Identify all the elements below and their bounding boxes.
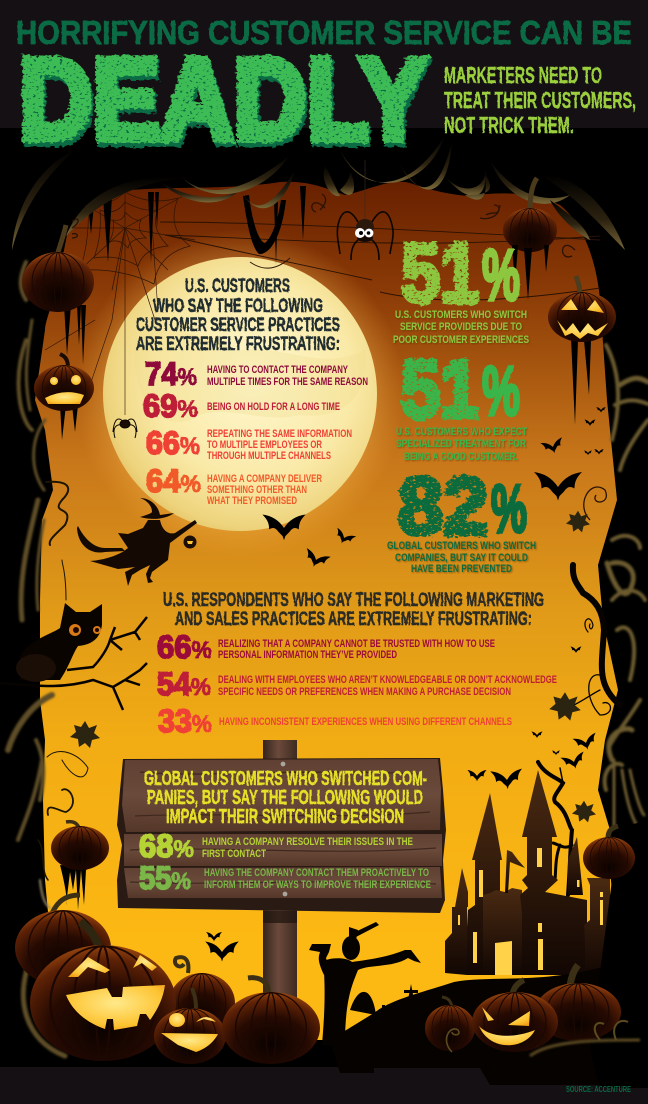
marketing stat: 66%: REALIZING THAT A COMPANY CANNOT BE TRUSTED WITH HOW TO USE xyxy=(218,638,495,650)
right stat: 82% xyxy=(387,461,536,575)
moon panel heading: CUSTOMER SERVICE PRACTICES xyxy=(136,315,340,336)
moon panel heading: ARE EXTREMELY FRUSTRATING: xyxy=(136,334,340,355)
sign stat: 55%: 55% xyxy=(139,860,191,896)
subheading xyxy=(444,62,636,138)
graveyard silhouettes xyxy=(350,984,418,1020)
moon stat: 64%: WHAT THEY PROMISED xyxy=(207,495,297,507)
black vine on right xyxy=(568,565,620,715)
moon stat: 69% xyxy=(143,388,340,424)
footer band xyxy=(0,1067,648,1104)
moon stat: 66%: THROUGH MULTIPLE CHANNELS xyxy=(207,450,331,462)
pumpkin mid back xyxy=(169,957,235,1033)
moon stat: 64%: 64% xyxy=(146,463,201,499)
sign stat: 68% xyxy=(139,828,413,864)
orange sky arena xyxy=(35,182,620,1040)
sign stat: 68%: FIRST CONTACT xyxy=(202,848,266,860)
right stat: 51% expect: SPECIALIZED TREATMENT FOR xyxy=(396,438,526,450)
marketing stat: 66% xyxy=(157,629,495,665)
right stat: 51% expect: U.S. CUSTOMERS WHO EXPECT xyxy=(396,426,527,438)
moon panel heading xyxy=(136,276,340,355)
moon stat: 69%: BEING ON HOLD FOR A LONG TIME xyxy=(207,401,340,413)
pumpkin on left branch xyxy=(51,822,109,910)
sign heading: PANIES, BUT SAY THE FOLLOWING WOULD xyxy=(147,787,423,809)
marketing stat: 66%: PERSONAL INFORMATION THEY’VE PROVIDED xyxy=(218,649,397,661)
sign stat: 68%: HAVING A COMPANY RESOLVE THEIR ISSUES IN THE xyxy=(202,836,413,848)
marketing stat: 54%: 54% xyxy=(157,666,211,702)
moon glow xyxy=(75,229,405,559)
ground hill xyxy=(330,960,648,1085)
right stat: 82%: COMPANIES, BUT SAY IT COULD xyxy=(395,552,528,564)
marketing stat: 54% xyxy=(157,666,557,702)
dead tree by castle xyxy=(538,762,572,895)
right frame vines xyxy=(605,345,648,840)
big jack-o-lantern xyxy=(30,922,176,1061)
sign stat: 68%: 68% xyxy=(139,828,194,864)
moon xyxy=(103,257,377,531)
bats xyxy=(205,407,606,961)
sign heading: GLOBAL CUSTOMERS WHO SWITCHED COM- xyxy=(144,768,427,790)
icon: witch on broom xyxy=(77,498,197,586)
right stat: 51% expect: 51 xyxy=(401,344,479,435)
castle windows xyxy=(458,848,603,975)
pumpkin back left xyxy=(15,895,111,986)
moon stat: 74% xyxy=(145,356,368,392)
cobweb xyxy=(72,190,195,320)
header band xyxy=(0,0,648,128)
hanging threads and wires xyxy=(45,195,600,415)
subheading: NOT TRICK THEM. xyxy=(444,112,574,138)
moon stat: 74%: 74% xyxy=(145,356,197,392)
icon: left jack-o-lantern xyxy=(34,354,94,440)
icon: big spider xyxy=(337,160,393,260)
headline: deadly: DEADLY xyxy=(19,34,427,164)
right stat: 51% expect: % xyxy=(482,352,520,430)
right stat: 51% expect xyxy=(396,344,527,463)
icon: right jack-o-lantern xyxy=(548,276,616,425)
icon: black cat on branch xyxy=(0,603,147,710)
signpost xyxy=(263,740,297,1010)
canopy vines xyxy=(12,135,625,250)
moon stat: 64%: SOMETHING OTHER THAN xyxy=(207,484,307,496)
leaves xyxy=(70,511,596,822)
moon stat: 66%: 66% xyxy=(146,425,200,461)
left frame vines xyxy=(8,262,65,1056)
right stat: 51% expect: BEING A GOOD CUSTOMER. xyxy=(404,451,518,463)
right trunk below vine xyxy=(610,820,648,1000)
right stat: 51% switch: U.S. CUSTOMERS WHO SWITCH xyxy=(395,309,527,321)
right stat: 82%: 82 xyxy=(398,461,488,552)
right stat: 51% switch: 51 xyxy=(401,226,479,320)
right stat: 51% switch: % xyxy=(482,236,520,316)
moon panel heading: U.S. CUSTOMERS xyxy=(185,276,290,297)
icon: zombie with axe xyxy=(309,922,421,1045)
marketing stat: 33%: 33% xyxy=(158,703,212,739)
right stat: 82%: HAVE BEEN PREVENTED xyxy=(411,563,512,575)
right stat: 51% switch: SERVICE PROVIDERS DUE TO xyxy=(400,321,522,333)
right edge dark xyxy=(590,870,648,1088)
marketing stat: 33%: HAVING INCONSISTENT EXPERIENCES WHEN USING DIFFERENT CHANNELS xyxy=(219,716,512,728)
right jack-o-lantern bottom xyxy=(472,980,640,1056)
marketing section heading xyxy=(163,590,544,630)
right stat: 51% switch xyxy=(393,226,529,346)
center pumpkin xyxy=(222,978,320,1064)
curl ornaments xyxy=(72,194,606,520)
moon stat: 64% xyxy=(146,463,322,507)
moon stat: 74%: MULTIPLE TIMES FOR THE SAME REASON xyxy=(207,376,368,388)
sign stat: 55%: INFORM THEM OF WAYS TO IMPROVE THEIR EXPERIENCE xyxy=(204,879,431,891)
sign heading xyxy=(144,768,427,828)
sign stat: 55% xyxy=(139,860,431,896)
back right pumpkin xyxy=(535,965,628,1041)
sign heading: IMPACT THEIR SWITCHING DECISION xyxy=(166,806,404,828)
sign board xyxy=(117,758,446,913)
marketing stat: 54%: SPECIFIC NEEDS OR PREFERENCES WHEN MAKING A PURCHASE DECISION xyxy=(218,686,511,698)
small jack-o-lantern xyxy=(154,988,226,1064)
castle xyxy=(445,770,610,975)
pumpkin on right vine xyxy=(583,826,635,879)
marketing stat: 33% xyxy=(158,703,512,739)
icon: small spider xyxy=(113,419,137,438)
moon stat: 69%: 69% xyxy=(143,388,198,424)
moon stat: 66% xyxy=(146,425,352,462)
headline: deadly: DEADLY xyxy=(21,38,429,168)
moon panel heading: WHO SAY THE FOLLOWING xyxy=(153,296,323,317)
moon stat: 64%: HAVING A COMPANY DELIVER xyxy=(207,473,322,485)
icon: top right pumpkin xyxy=(503,178,557,300)
marketing stat: 66%: 66% xyxy=(157,629,212,665)
curly vines on left xyxy=(38,482,88,880)
moon stat: 66%: REPEATING THE SAME INFORMATION xyxy=(207,428,352,440)
icon: top left pumpkin xyxy=(22,225,94,365)
moon stat: 66%: TO MULTIPLE EMPLOYEES OR xyxy=(207,439,322,451)
sign stat: 55%: HAVING THE COMPANY CONTACT THEM PROACTIVELY TO xyxy=(204,867,429,879)
right small pumpkin xyxy=(425,997,475,1052)
right stat: 82%: GLOBAL CUSTOMERS WHO SWITCH xyxy=(387,540,536,552)
right stat: 51% switch: POOR CUSTOMER EXPERIENCES xyxy=(393,334,529,346)
moon stat: 74%: HAVING TO CONTACT THE COMPANY xyxy=(207,364,348,376)
right stat: 82%: % xyxy=(491,471,527,547)
black drips xyxy=(88,186,306,265)
